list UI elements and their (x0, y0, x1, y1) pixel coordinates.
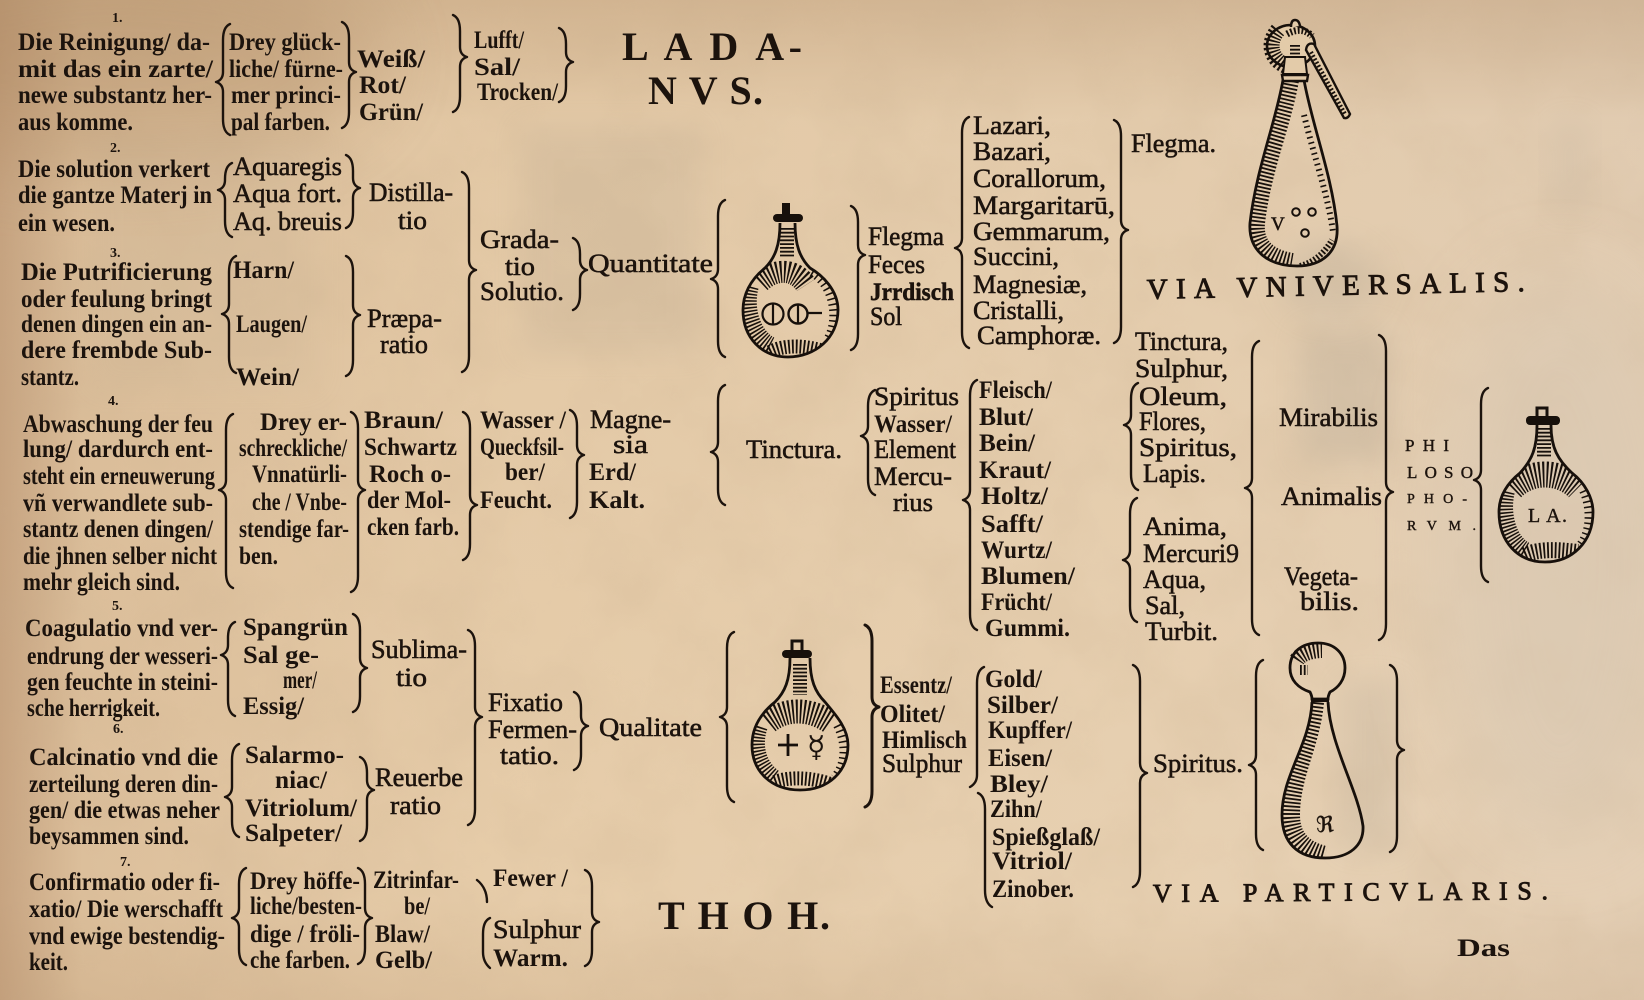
plant and animal materials list: Wurtz/ (981, 537, 1053, 564)
flegma list: Flegma (868, 222, 944, 251)
philosophorum label: LOSO (1407, 463, 1473, 482)
step 3 operation: ratio (380, 330, 428, 359)
step 7 qualities: Fewer / (493, 865, 569, 892)
step 3 materials: Laugen/ (236, 311, 308, 338)
spiritus list: rius (893, 488, 933, 517)
step 1 colours list: mer princi- (231, 82, 341, 109)
metals list (985, 666, 1101, 903)
step 5 description: sche herrigkeit. (27, 695, 160, 722)
kingdoms list: bilis. (1300, 587, 1359, 616)
tinctura brace (711, 385, 725, 505)
label: Qualitate: Qualitate (599, 713, 702, 742)
panel: via particularis (1133, 643, 1548, 908)
step 5 braces (221, 614, 588, 825)
kingdoms list (1279, 403, 1382, 616)
plant and animal materials list: Safft/ (981, 511, 1044, 538)
step 5 materials: Essig/ (243, 693, 305, 720)
spiritus list (874, 382, 959, 517)
step 1 colours list: liche/ fürne- (229, 56, 343, 83)
step 3 description: denen dingen ein an- (21, 311, 212, 338)
fixatio and fermentatio: tatio. (500, 741, 559, 770)
plant and animal materials list: Kraut/ (979, 457, 1052, 484)
magnesia and earth: sia (613, 430, 649, 459)
plant and animal materials list: Blumen/ (981, 563, 1076, 590)
philosophorum label: RVM. (1407, 519, 1476, 534)
tinctura list: Lapis. (1143, 459, 1206, 488)
step 6 materials (245, 742, 358, 847)
metals list: Silber/ (987, 692, 1059, 719)
spiritus label: Spiritus. (1153, 749, 1243, 778)
panel: step 6 calcination (29, 722, 463, 850)
step 3 operation (367, 304, 442, 359)
qualitate right brace (865, 625, 879, 807)
essentz list: Essentz/ (880, 672, 953, 699)
title: THOH: T H O H. (658, 893, 830, 938)
quantitate flask braces (711, 200, 865, 357)
gemstone names: Camphoræ. (977, 321, 1101, 350)
panel: step 5 coagulation (25, 599, 588, 825)
step 2 description: Die solution verkert (18, 156, 211, 183)
step 1 braces (216, 15, 573, 135)
metals list: Vitriol/ (992, 848, 1073, 875)
heading: VIA PARTICVLARIS: VIA PARTICVLARIS. (1153, 876, 1548, 908)
gemstone names: Bazari, (973, 137, 1051, 166)
step 4 colours text: Vnnatürli- (252, 461, 347, 488)
heading: VIA VNIVERSALIS: VIA VNIVERSALIS. (1146, 266, 1525, 306)
anima list: Turbit. (1145, 617, 1218, 646)
step 4 description: vñ verwandlete sub- (23, 490, 213, 517)
spiritus brace (861, 390, 875, 495)
essentz list: Himlisch (882, 727, 967, 754)
step 7 description: Confirmatio oder fi- (29, 869, 220, 896)
plant and animal materials list: Holtz/ (981, 483, 1049, 510)
kingdoms braces (1123, 335, 1488, 640)
step number 6: 6. (113, 722, 124, 737)
step 6 description: Calcinatio vnd die (29, 744, 218, 771)
step 1 description: Die Reinigung/ da- (18, 29, 210, 56)
gemstone names: Margaritarū, (973, 191, 1115, 220)
metals list: Bley/ (990, 771, 1049, 798)
anima list: Aqua, (1143, 565, 1206, 594)
step 4 description (23, 411, 218, 596)
plant and animal materials list (979, 377, 1076, 642)
panel: step 7 fixation (29, 855, 599, 976)
title: LADANVS: N V S. (648, 68, 763, 113)
label: Quantitate: Quantitate (588, 249, 713, 278)
step 7 qualities: Sulphur (493, 915, 581, 944)
step 4 colours text: che / Vnbe- (252, 489, 347, 516)
step 1 colours list (229, 29, 343, 136)
step 6 description: beysammen sind. (29, 823, 189, 850)
step 4 colours text (239, 409, 349, 570)
gradatio and solutio: Grada- (480, 225, 559, 254)
gradatio and solutio: Solutio. (480, 277, 564, 306)
gradatio and solutio: tio (505, 252, 535, 281)
step 3 materials: Wein/ (236, 364, 300, 391)
step 7 description: xatio/ Die werschafft (29, 896, 224, 923)
tinctura label: Tinctura. (746, 435, 842, 464)
anima list: Anima, (1143, 512, 1227, 541)
fixatio and fermentatio: Fermen- (488, 715, 577, 744)
step 3 description: oder feulung bringt (21, 286, 213, 313)
step 4 qualities: ber/ (505, 459, 546, 486)
step 5 description: Coagulatio vnd ver- (25, 615, 218, 642)
fixatio and fermentatio (488, 688, 577, 770)
step 4 description: lung/ dardurch ent- (23, 436, 213, 463)
step 7 description (29, 869, 225, 976)
anima list (1143, 512, 1239, 646)
step 2 description: ein wesen. (18, 210, 115, 237)
step 5 materials: Spangrün (243, 614, 348, 641)
gemstones braces (955, 117, 1128, 348)
step 4 colours text: schreckliche/ (239, 435, 348, 462)
step 4 colour names: der Mol- (367, 487, 451, 514)
step 6 materials: niac/ (275, 767, 328, 794)
step 3 description: Die Putrificierung (21, 259, 212, 286)
philosophorum label: PHI (1405, 436, 1449, 455)
step 4 colours text: Drey er- (260, 409, 347, 436)
step 6 operation: ratio (390, 791, 441, 820)
step 1 colour names: Grün/ (359, 99, 424, 126)
step 5 description: endrung der wesseri- (27, 643, 218, 670)
step 4 colours text: stendige far- (239, 516, 349, 543)
panel: step 1 purification (18, 11, 573, 136)
gradatio and solutio (480, 225, 564, 306)
step 4 qualities: Wasser / (480, 407, 567, 434)
step 2 operation: Distilla- (369, 178, 453, 207)
anima list: Mercuri9 (1143, 539, 1239, 568)
metals list: Spießglaß/ (992, 824, 1101, 851)
step 6 operation: Reuerbe (375, 763, 463, 792)
panel: tinctura column (711, 377, 1076, 642)
step 4 colour names: cken farb. (367, 514, 459, 541)
spiritus list: Mercu- (874, 462, 952, 491)
gemstone names: Lazari, (973, 111, 1051, 140)
step 4 qualities: Queckfsil- (480, 434, 564, 461)
step 4 description: stantz denen dingen/ (23, 516, 214, 543)
step 3 description (21, 259, 213, 391)
essentz list: Sulphur (882, 749, 962, 778)
magnesia and earth: Kalt. (589, 487, 645, 514)
plant and animal materials list: Frücht/ (981, 589, 1053, 616)
panel: steps 2 and 3 solution and putrefaction (18, 141, 587, 391)
step 6 operation (375, 763, 463, 820)
qualitate left brace (720, 632, 734, 802)
flask: round flask with symbols (743, 203, 838, 357)
step 3 materials: Harn/ (233, 257, 295, 284)
step 1 colours list: Drey glück- (229, 29, 341, 56)
step 7 colour names: Gelb/ (375, 947, 433, 974)
spiritus braces (1133, 660, 1404, 887)
tinctura list: Oleum, (1139, 382, 1227, 411)
flegma label: Flegma. (1131, 129, 1216, 158)
step 5 description: gen feuchte in steini- (27, 669, 218, 696)
step 4 description: mehr gleich sind. (23, 569, 180, 596)
tinctura list: Tinctura, (1135, 327, 1228, 356)
step 1 qualities: Sal/ (474, 54, 521, 81)
step 5 materials: mer/ (283, 667, 318, 694)
flegma list (868, 222, 954, 331)
flask: round flask LA (1498, 408, 1593, 562)
step 5 materials: Sal ge- (243, 642, 319, 669)
flask: tall retort via universalis: V (1271, 214, 1285, 235)
step 6 materials: Vitriolum/ (245, 795, 358, 822)
step 4 colour names (364, 407, 459, 541)
step 1 colours list: pal farben. (231, 109, 330, 136)
metals list: Zinober. (992, 876, 1074, 903)
steps 2 and 3 braces (218, 155, 587, 376)
step 2 acids: Aqua fort. (233, 179, 342, 208)
gemstone names: Corallorum, (973, 164, 1106, 193)
step 6 braces (225, 744, 374, 841)
step 2 operation: tio (398, 206, 427, 235)
flask: long neck bolt head: ℜ (1316, 812, 1334, 837)
spiritus list: Element (874, 435, 957, 464)
plant and animal materials list: Bein/ (979, 430, 1036, 457)
step 7 colour names: Blaw/ (375, 921, 431, 948)
title: LADANVS (622, 24, 802, 113)
fixatio and fermentatio: Fixatio (488, 688, 563, 717)
step 6 materials: Salpeter/ (245, 820, 343, 847)
flask: round flask cross and mercury (752, 641, 848, 790)
step 7 colours text: liche/besten- (250, 893, 362, 920)
magnesia and earth: Erd/ (589, 459, 637, 486)
gemstone names (973, 111, 1115, 350)
step number 2: 2. (110, 141, 120, 156)
step 5 operation (371, 635, 467, 692)
step 2 acids: Aquaregis (233, 152, 342, 181)
step 1 description: aus komme. (18, 109, 133, 136)
tinctura list: Sulphur, (1135, 354, 1228, 383)
step 7 colours text: dige / fröli- (250, 921, 360, 948)
step 1 description: mit das ein zarte/ (18, 56, 214, 83)
step 7 description: keit. (29, 949, 68, 976)
panel: gemstones list (955, 111, 1216, 350)
step 7 braces (232, 868, 599, 968)
step 5 operation: Sublima- (371, 635, 467, 664)
step 7 colour names: Zitrinfar- (373, 867, 459, 894)
tinctura list (1135, 327, 1237, 488)
tinctura list: Flores, (1139, 407, 1206, 436)
step 1 colour names: Rot/ (359, 72, 407, 99)
step number 3: 3. (110, 246, 120, 261)
anima list: Sal, (1145, 591, 1185, 620)
step 3 description: stantz. (21, 364, 79, 391)
step 7 colour names: be/ (404, 893, 431, 920)
panel: qualitate flask column (720, 625, 1101, 907)
step 1 qualities: Lufft/ (474, 27, 525, 54)
panel: step 4 ablution (23, 394, 671, 596)
step 6 description (29, 744, 220, 850)
magnesia and earth: Magne- (590, 405, 671, 434)
step number 5: 5. (112, 599, 122, 614)
step 3 materials (233, 257, 308, 391)
gemstone names: Magnesiæ, (973, 270, 1087, 299)
step 4 description: steht ein erneuwerung (23, 463, 215, 490)
step 6 description: zerteilung deren din- (29, 771, 218, 798)
step 4 colour names: Roch o- (369, 461, 451, 488)
step 5 materials (243, 614, 348, 720)
catchword: Das: Das (1457, 935, 1510, 962)
metals list: Eisen/ (988, 745, 1053, 772)
panel: quantitate flask column (711, 200, 954, 357)
philosophorum label: PHO- (1407, 492, 1467, 507)
step 2 acids (233, 152, 342, 236)
step 1 qualities: Trocken/ (477, 79, 559, 106)
flegma list: Feces (868, 250, 925, 279)
step 7 qualities (493, 865, 581, 972)
step 4 qualities: Feucht. (480, 487, 552, 514)
plant and animal materials list: Blut/ (979, 404, 1034, 431)
step 2 description (18, 156, 212, 237)
step number 7: 7. (120, 855, 130, 870)
step 6 description: gen/ die etwas neher (29, 797, 220, 824)
plant and animal materials list: Fleisch/ (979, 377, 1053, 404)
kingdoms list: Animalis (1281, 482, 1382, 511)
step 4 braces (219, 410, 584, 592)
plant and animal materials list: Gummi. (985, 615, 1070, 642)
metals list: Zihn/ (990, 796, 1043, 823)
step 1 colour names (357, 46, 426, 126)
step 1 colour names: Weiß/ (357, 46, 426, 73)
step 5 description (25, 615, 218, 722)
step 7 qualities: Warm. (493, 945, 568, 972)
step 4 description: Abwaschung der feu (23, 411, 213, 438)
step 3 operation: Præpa- (367, 304, 442, 333)
metals list: Gold/ (985, 666, 1043, 693)
step 4 description: die jhnen selber nicht (23, 543, 218, 570)
metals list: Kupffer/ (988, 717, 1073, 744)
essentz list (880, 672, 967, 778)
flegma list: Jrrdisch (870, 279, 954, 306)
magnesia and earth (589, 405, 671, 514)
step 7 colours text: che farben. (250, 947, 350, 974)
flegma list: Sol (870, 302, 902, 331)
gemstone names: Succini, (973, 242, 1059, 271)
spiritus list: Wasser/ (874, 411, 953, 438)
step 5 operation: tio (396, 663, 427, 692)
step 4 qualities (480, 407, 567, 514)
essentz list: Olitet/ (880, 701, 946, 728)
flask: round flask cross and mercury: ☿ (807, 730, 825, 765)
plant and animal materials brace (963, 380, 977, 630)
step 1 description (18, 29, 214, 136)
step 7 description: vnd ewige bestendig- (29, 923, 225, 950)
tinctura list: Spiritus, (1139, 433, 1237, 462)
step 4 colour names: Schwartz (364, 434, 457, 461)
step 7 colour names (373, 867, 459, 974)
kingdoms list: Vegeta- (1284, 562, 1358, 591)
kingdoms list: Mirabilis (1279, 403, 1378, 432)
step number 4: 4. (108, 394, 118, 409)
step 1 qualities (474, 27, 559, 106)
step 2 operation (369, 178, 453, 235)
step 4 colour names: Braun/ (364, 407, 444, 434)
flask: tall retort via universalis (1250, 20, 1350, 266)
step 7 colours text (250, 868, 362, 974)
flask: round flask LA: L A. (1528, 505, 1567, 527)
title: LADANVS: L A D A- (622, 24, 802, 69)
philosophorum label (1405, 436, 1476, 534)
step 2 acids: Aq. breuis (233, 207, 342, 236)
spiritus list: Spiritus (874, 382, 959, 411)
step 2 description: die gantze Materj in (18, 182, 212, 209)
step 3 description: dere frembde Sub- (21, 337, 212, 364)
panel: tinctura and anima lists (1123, 327, 1488, 646)
step 7 colours text: Drey höffe- (250, 868, 360, 895)
gemstone names: Cristalli, (973, 296, 1064, 325)
flask: long neck bolt head (1282, 643, 1363, 858)
gemstone names: Gemmarum, (973, 217, 1110, 246)
step 4 colours text: ben. (239, 543, 278, 570)
step 6 materials: Salarmo- (245, 742, 344, 769)
metals braces (970, 667, 992, 907)
step number 1: 1. (112, 11, 122, 26)
step 1 description: newe substantz her- (18, 82, 212, 109)
